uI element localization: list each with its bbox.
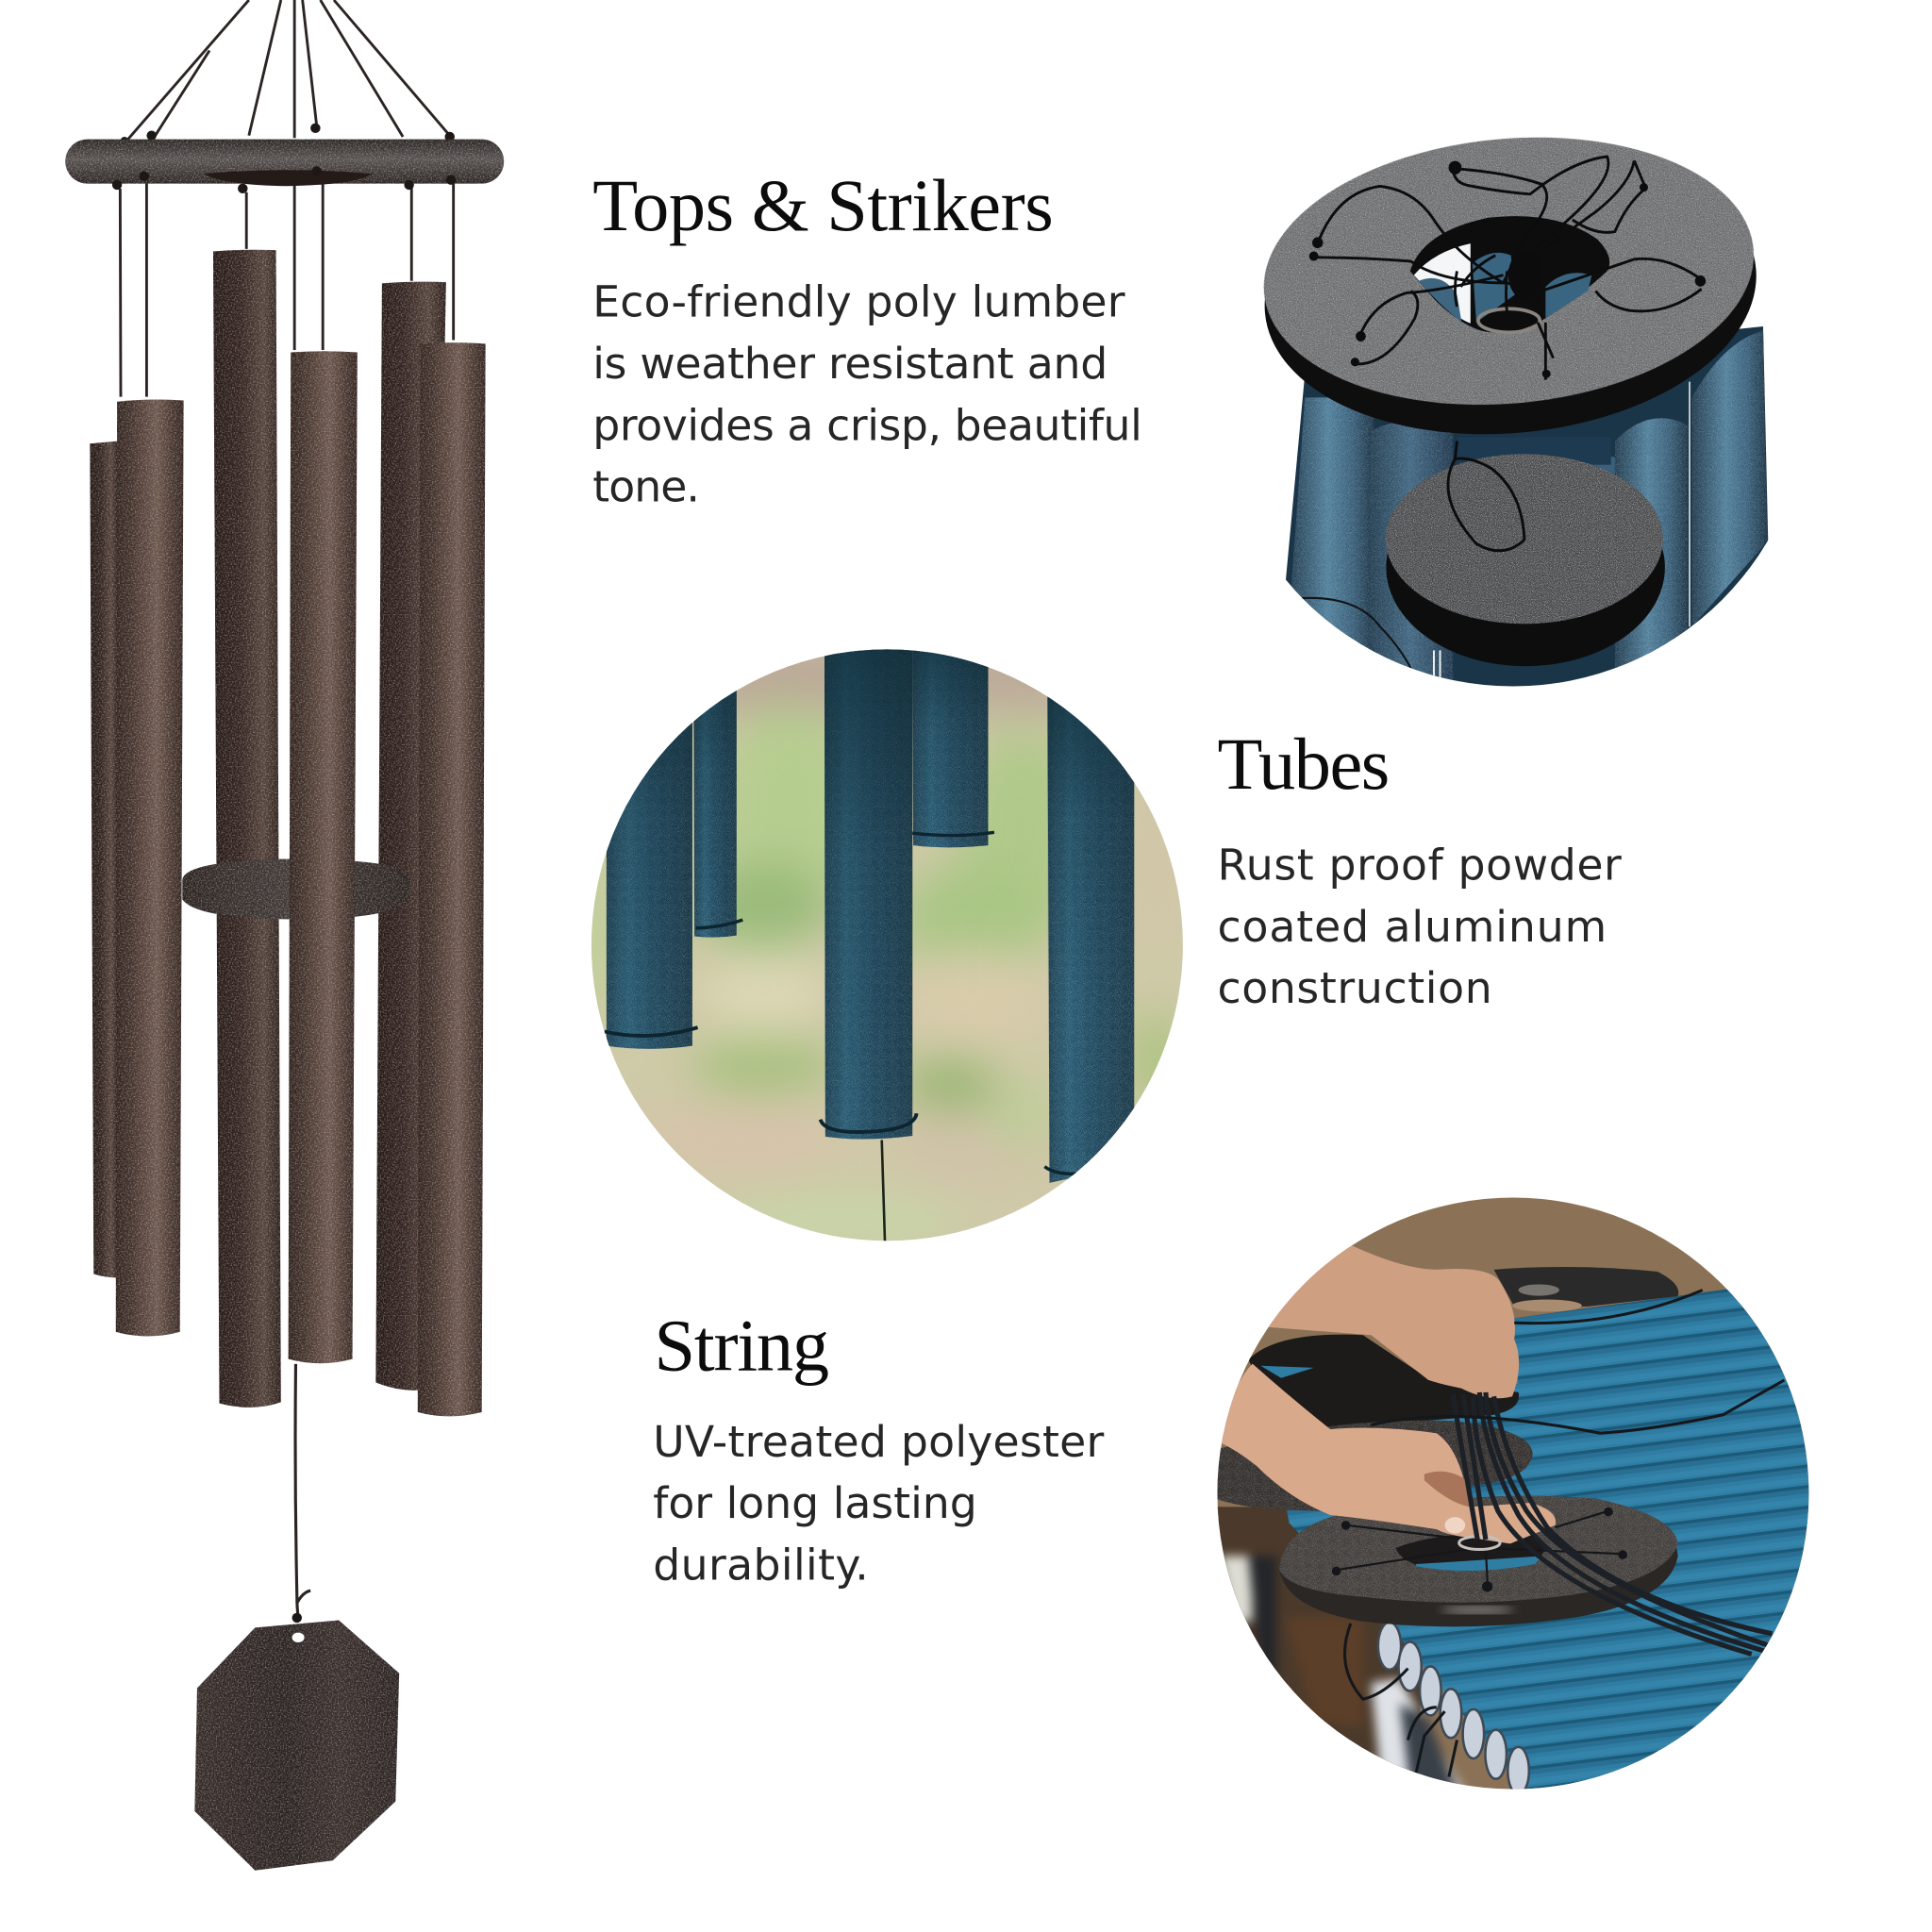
text: string description: durability. xyxy=(653,1540,869,1590)
tube right front xyxy=(418,342,486,1416)
wire xyxy=(882,1140,885,1246)
wind chime product xyxy=(65,0,504,1871)
striker xyxy=(1386,441,1665,666)
tube left front xyxy=(116,399,184,1336)
text: tubes description: construction xyxy=(1217,963,1492,1013)
photo: hands threading string xyxy=(1208,1188,1821,1802)
back disk xyxy=(1494,1267,1678,1307)
text: tubes description: Rust proof powder xyxy=(1217,841,1622,891)
left disks xyxy=(1216,1335,1533,1511)
blue tubes xyxy=(1286,326,1768,687)
text: tubes description xyxy=(1217,841,1622,1013)
hand upper xyxy=(1265,1245,1519,1398)
strings on top disk xyxy=(1312,157,1704,380)
tube back left xyxy=(90,441,118,1277)
tubes in photo xyxy=(605,633,1134,1246)
heading: tubes: Tubes xyxy=(1217,723,1390,805)
ring and string bundle xyxy=(1344,1291,1784,1777)
text: tubes description: coated aluminum xyxy=(1217,902,1607,952)
top disk xyxy=(1264,138,1757,434)
blue tube bed xyxy=(1257,1288,1821,1802)
workshop background xyxy=(1208,1188,1821,1802)
tube back right xyxy=(375,282,446,1391)
text: tops and strikers description xyxy=(592,277,1142,512)
tube center back xyxy=(213,250,281,1407)
wind sail xyxy=(194,1613,399,1871)
sail string xyxy=(295,1364,310,1617)
heading: string: String xyxy=(655,1304,829,1386)
front disk xyxy=(1279,1496,1678,1626)
hanging strings above ring xyxy=(120,0,455,397)
silver tube ends xyxy=(1378,1623,1529,1794)
text: tops and strikers description: is weather resistant and xyxy=(592,339,1108,389)
text: string description xyxy=(653,1417,1104,1590)
tube center front xyxy=(289,351,358,1363)
striker disk xyxy=(182,858,409,919)
text: tops and strikers description: Eco-friendly poly lumber xyxy=(592,277,1125,327)
blurred garden background xyxy=(579,637,1195,1253)
heading: tops and strikers: Tops & Strikers xyxy=(592,164,1054,246)
text: string description: for long lasting xyxy=(653,1478,977,1528)
text: tops and strikers description: tone. xyxy=(592,462,700,512)
photo: top and striker close up xyxy=(1264,138,1768,687)
text: tops and strikers description: provides a crisp, beautiful xyxy=(592,400,1142,450)
photo: powder coated tubes xyxy=(579,633,1195,1253)
hand lower xyxy=(1218,1364,1556,1543)
top ring xyxy=(65,140,504,193)
text: string description: UV-treated polyester xyxy=(653,1417,1104,1467)
